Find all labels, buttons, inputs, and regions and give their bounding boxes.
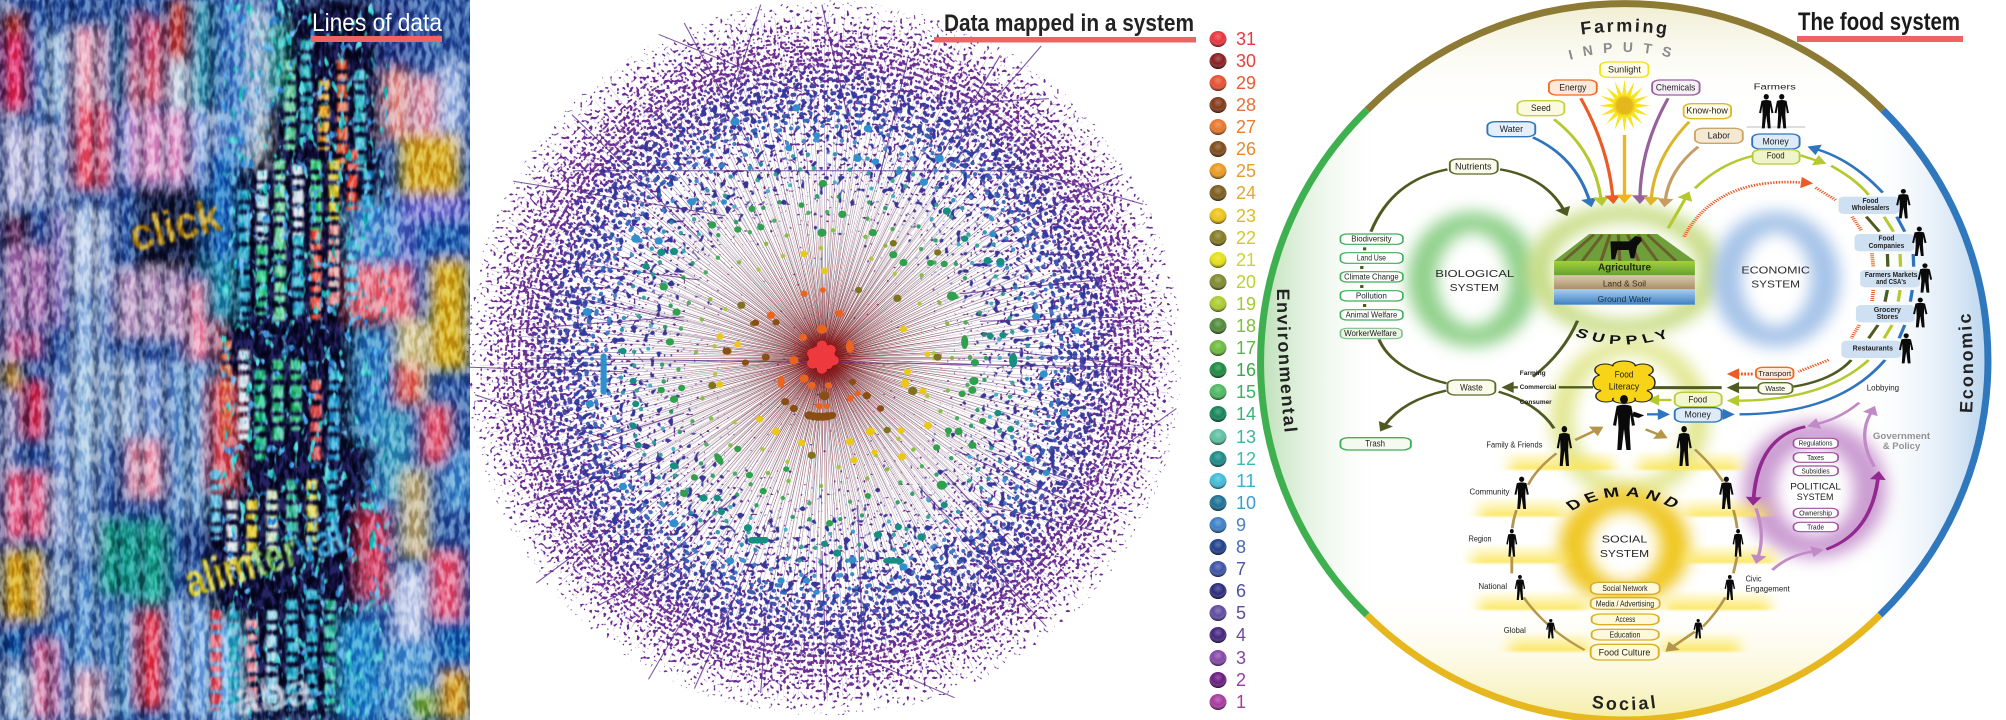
pill: climate change: Climate Change <box>1344 273 1399 282</box>
social scale labels <box>1469 384 1899 635</box>
pill: education: Education <box>1609 631 1640 640</box>
dark column gaps <box>0 0 225 720</box>
legend item 7: 7 <box>1236 559 1246 579</box>
arrow: money to farmers <box>1817 149 1883 193</box>
legend item 15 <box>1210 382 1256 402</box>
farmers group <box>1747 82 1805 128</box>
store: farmers markets <box>1860 263 1932 293</box>
pill: energy: Energy <box>1559 83 1587 93</box>
orange nodes <box>767 287 861 409</box>
pill: land use: Land Use <box>1357 254 1386 263</box>
legend item 11: 11 <box>1236 471 1256 491</box>
agriculture block: Agriculture <box>1598 262 1651 273</box>
legend item 27 <box>1210 117 1256 137</box>
legend item 4: 4 <box>1236 625 1246 645</box>
arrow: transport dotted <box>1684 182 1836 237</box>
label: social: Social <box>1592 695 1655 710</box>
legend item 1: 1 <box>1236 692 1246 712</box>
pill: regulations: Regulations <box>1799 439 1833 447</box>
arrow: nutrients cycle <box>1371 169 1578 383</box>
input pills <box>1450 62 1800 174</box>
legend item 16 <box>1210 360 1256 380</box>
sun icon <box>1599 80 1650 132</box>
legend item 21 <box>1210 250 1256 270</box>
legend item 8 <box>1210 537 1246 557</box>
arrow: money onward <box>1723 411 1724 418</box>
food culture stack <box>1591 582 1660 660</box>
photo grain overlay <box>0 0 470 720</box>
label: political system <box>1790 482 1841 502</box>
arrow: waste return head <box>1737 384 1757 391</box>
arrow: consumer waste <box>1499 392 1554 428</box>
long chord links <box>470 5 1176 698</box>
legend item 23: 23 <box>1236 206 1256 226</box>
legend item 26: 26 <box>1236 139 1256 159</box>
arrow: transport return <box>1737 369 1753 378</box>
ring: agriculture <box>1539 213 1710 328</box>
legend item 28 <box>1210 95 1256 115</box>
outer ring: economic segment <box>1880 110 1988 615</box>
arrow: consumer to society <box>1575 431 1595 440</box>
outer disc with tinted edges <box>1255 0 1995 720</box>
pill: know-how: Know-how <box>1686 106 1728 116</box>
outer ring: farming segment <box>1367 4 1883 110</box>
social scale labels: National <box>1478 582 1507 591</box>
legend item 9: 9 <box>1236 515 1246 535</box>
agriculture block: Ground Water <box>1597 295 1652 304</box>
photo text letters: click <box>124 189 226 262</box>
store: farmers markets: Farmers Markets <box>1865 270 1917 279</box>
agriculture block <box>1554 234 1695 305</box>
arrow: bottom return flows <box>1737 360 1885 414</box>
blurred code screen photograph <box>0 0 470 720</box>
lower diagram <box>1340 361 1930 660</box>
legend: node levels 31 to 1 <box>1210 29 1256 712</box>
legend item 21: 21 <box>1236 250 1256 270</box>
label: environmental: Environmental <box>1277 290 1298 432</box>
pill: food from farmers <box>1753 150 1800 164</box>
legend item 5 <box>1210 603 1246 623</box>
legend item 3 <box>1210 648 1246 668</box>
pill: money from consumer <box>1675 408 1722 422</box>
arrow: commercial waste <box>1512 384 1593 391</box>
legend item 5: 5 <box>1236 603 1246 623</box>
legend item 16: 16 <box>1236 360 1256 380</box>
store: restaurants: Restaurants <box>1853 344 1893 352</box>
label: political system: POLITICAL <box>1790 482 1841 492</box>
pill: seed <box>1517 101 1564 116</box>
demand circle left <box>1512 453 1585 650</box>
label: social system <box>1600 534 1649 559</box>
arrow: chemicals input <box>1640 98 1668 197</box>
legend item 12: 12 <box>1236 449 1256 469</box>
legend item 2 <box>1210 670 1246 690</box>
node rings <box>498 32 1150 684</box>
pill: taxes: Taxes <box>1807 453 1824 462</box>
soft system rings <box>1422 213 1870 593</box>
list connector dots <box>1360 247 1366 307</box>
store: grocery stores <box>1856 298 1927 327</box>
diagram body in zoom coordinates <box>1340 61 1932 661</box>
store: grocery stores: Stores <box>1877 312 1898 321</box>
legend item 10: 10 <box>1236 493 1256 513</box>
farmers group: Farmers <box>1754 82 1796 92</box>
pill: subsidies: Subsidies <box>1801 467 1830 475</box>
legend item 23 <box>1210 206 1256 226</box>
agriculture block: Land & Soil <box>1603 280 1646 289</box>
social scale labels: Civic <box>1746 575 1762 584</box>
legend item 14 <box>1210 404 1256 424</box>
label: government and policy <box>1873 432 1930 451</box>
arrow: water input <box>1533 137 1589 200</box>
legend item 14: 14 <box>1236 404 1256 424</box>
pill: know-how <box>1684 104 1731 119</box>
legend item 18 <box>1210 316 1256 336</box>
label: economic system: ECONOMIC <box>1741 265 1810 276</box>
legend item 2: 2 <box>1236 670 1246 690</box>
legend item 24 <box>1210 183 1256 203</box>
pill: nutrients: Nutrients <box>1455 162 1492 172</box>
pill: food from farmers: Food <box>1767 151 1785 161</box>
label: supply: SUPPLY <box>1576 329 1665 344</box>
pill: water: Water <box>1500 125 1523 134</box>
legend item 6: 6 <box>1236 581 1246 601</box>
pill: animal welfare: Animal Welfare <box>1346 311 1397 320</box>
pill: biodiversity: Biodiversity <box>1351 235 1392 244</box>
arrow: into food culture <box>1673 632 1695 647</box>
title: lines of data: Lines of data <box>312 9 442 37</box>
waste source labels: Farming <box>1520 369 1546 377</box>
pill: return waste: Waste <box>1765 384 1785 393</box>
title: the food system: The food system <box>1798 8 1960 36</box>
pill: transport: Transport <box>1758 369 1791 378</box>
political system pills <box>1793 438 1838 532</box>
store: farmers markets: and CSA's <box>1876 277 1906 286</box>
pill: media advertising: Media / Advertising <box>1596 600 1654 609</box>
ring: political system <box>1759 433 1870 547</box>
olive nodes <box>708 240 942 459</box>
arrow: waste to trash <box>1385 391 1446 425</box>
arrow: literacy to waste <box>1653 383 1722 392</box>
legend item 24: 24 <box>1236 183 1256 203</box>
pill: waste: Waste <box>1460 383 1483 393</box>
pill: ownership: Ownership <box>1799 509 1832 517</box>
pill: trash: Trash <box>1365 439 1385 449</box>
cow icon <box>1610 236 1642 259</box>
arrow: sunlight input <box>1621 135 1628 196</box>
label: economic system <box>1741 265 1810 290</box>
label: government and policy: Government <box>1873 432 1930 441</box>
label: biological system <box>1435 268 1514 293</box>
pill: food to consumer <box>1675 392 1722 407</box>
legend item 29 <box>1210 73 1256 93</box>
pill: food culture: Food Culture <box>1599 648 1650 658</box>
input arrows <box>1371 98 1914 414</box>
hand placed coloured nodes <box>583 104 1080 595</box>
label: inputs: INPUTS <box>1568 42 1672 60</box>
ring: social system <box>1574 500 1675 593</box>
store: restaurants <box>1841 333 1913 363</box>
pills: waste and trash <box>1340 367 1793 450</box>
store: food wholesalers <box>1839 189 1911 218</box>
food literacy cloud <box>1593 361 1655 403</box>
pill: trade: Trade <box>1807 523 1824 531</box>
pill: money to farmers <box>1752 134 1800 149</box>
legend item 31 <box>1210 29 1256 49</box>
outer ring: environmental segment <box>1261 110 1367 615</box>
legend item 3: 3 <box>1236 648 1246 668</box>
arrow: food to market <box>1668 155 1869 228</box>
brown nodes <box>722 319 884 421</box>
pill: money from consumer: Money <box>1685 410 1711 420</box>
store: food companies: Food <box>1878 234 1894 242</box>
yellow nodes <box>716 251 932 463</box>
pill: water <box>1487 122 1535 137</box>
label: biological system: BIOLOGICAL <box>1435 268 1514 279</box>
legend item 29: 29 <box>1236 73 1256 93</box>
pill: pollution: Pollution <box>1356 292 1387 301</box>
pill: labor: Labor <box>1708 131 1730 141</box>
pill: return waste <box>1758 383 1793 394</box>
legend item 11 <box>1210 471 1256 491</box>
legend item 7 <box>1210 559 1246 579</box>
label: economic system: SYSTEM <box>1751 279 1800 290</box>
arrow: money from consumer <box>1647 411 1660 418</box>
legend item 19 <box>1210 294 1256 314</box>
legend item 13 <box>1210 427 1256 447</box>
label: biological system: SYSTEM <box>1450 282 1499 293</box>
legend item 13: 13 <box>1236 427 1256 447</box>
legend item 22: 22 <box>1236 228 1256 248</box>
purple outer node speckle <box>466 0 1182 716</box>
panel: the food system diagram <box>1257 0 1992 720</box>
legend item 30: 30 <box>1236 51 1256 71</box>
glyph columns <box>216 40 368 710</box>
teal nodes <box>619 207 1017 564</box>
pill: chemicals <box>1652 80 1700 95</box>
legend item 12 <box>1210 449 1256 469</box>
ring: biological system <box>1422 222 1524 337</box>
arrow: know-how input <box>1651 122 1689 198</box>
label: demand: DEMAND <box>1566 487 1678 510</box>
legend item 25: 25 <box>1236 161 1256 181</box>
pill: sunlight <box>1600 62 1648 77</box>
legend item 25 <box>1210 161 1256 181</box>
ring: economic system <box>1727 222 1825 337</box>
photo text letters <box>124 189 351 720</box>
store: food wholesalers: Wholesalers <box>1852 203 1889 212</box>
store: food companies: Companies <box>1869 241 1904 250</box>
pill: access: Access <box>1616 615 1635 624</box>
social scale figures <box>1506 426 1744 638</box>
social scale labels: Community <box>1470 488 1510 497</box>
pill: waste <box>1447 380 1495 395</box>
social scale labels: Family & Friends <box>1486 441 1542 450</box>
legend item 1 <box>1210 692 1246 712</box>
waste source labels <box>1520 369 1556 406</box>
label: government and policy: & Policy <box>1883 442 1921 451</box>
arrow: society from consumer <box>1646 429 1659 435</box>
radial links <box>652 186 996 530</box>
legend item 26 <box>1210 139 1256 159</box>
store: grocery stores: Grocery <box>1874 305 1901 314</box>
pill: labor <box>1695 128 1743 143</box>
demand bands <box>1472 450 1775 652</box>
legend item 17: 17 <box>1236 338 1256 358</box>
title: data mapped in a system: Data mapped in a system <box>944 10 1194 37</box>
outer ring: social segment <box>1367 615 1880 720</box>
pill: transport <box>1756 367 1793 379</box>
arrow: food to consumer <box>1657 396 1671 403</box>
demand circle right <box>1695 449 1737 627</box>
legend item 31: 31 <box>1236 29 1256 49</box>
ring: supply <box>1562 347 1698 490</box>
pill: seed: Seed <box>1531 104 1551 113</box>
biological issue list <box>1340 234 1403 339</box>
arrow: labor input <box>1665 147 1698 200</box>
arrow: energy input <box>1581 98 1613 197</box>
green nodes <box>658 180 986 526</box>
social scale labels: Global <box>1504 626 1526 635</box>
social scale labels: Region <box>1469 535 1492 544</box>
legend item 18: 18 <box>1236 316 1256 336</box>
pill: energy <box>1549 80 1597 95</box>
legend item 22 <box>1210 228 1256 248</box>
waste source labels: Consumer <box>1520 398 1552 406</box>
label: political system: SYSTEM <box>1797 493 1833 502</box>
label: social system: SYSTEM <box>1600 548 1649 559</box>
pill: nutrients <box>1450 159 1498 174</box>
pill: worker welfare: WorkerWelfare <box>1344 329 1397 338</box>
pill: food to consumer: Food <box>1688 395 1707 405</box>
legend item 19: 19 <box>1236 294 1256 314</box>
legend item 20: 20 <box>1236 272 1256 292</box>
glyph strokes <box>222 0 387 720</box>
pill: trash <box>1340 438 1411 450</box>
label: social system: SOCIAL <box>1602 534 1647 545</box>
arrow: seed input <box>1554 119 1601 199</box>
field furrows <box>1563 235 1676 261</box>
legend item 15: 15 <box>1236 382 1256 402</box>
legend item 9 <box>1210 515 1246 535</box>
label: economic: Economic <box>1958 314 1974 412</box>
social scale labels: Lobbying <box>1867 384 1899 393</box>
legend item 6 <box>1210 581 1246 601</box>
arrows around waste <box>1385 374 1878 650</box>
cyan and blue nodes <box>583 104 1080 595</box>
legend item 20 <box>1210 272 1256 292</box>
icon: consumer figure <box>1613 395 1644 450</box>
supply chain stores <box>1839 189 1932 363</box>
pill: money to farmers: Money <box>1763 137 1789 147</box>
legend item 17 <box>1210 338 1256 358</box>
panel: lines of data photo <box>0 0 470 720</box>
food literacy cloud: Literacy <box>1609 382 1640 392</box>
legend item 8: 8 <box>1236 537 1246 557</box>
red central cluster <box>807 341 839 374</box>
blue mid node speckle <box>514 48 1134 668</box>
legend item 28: 28 <box>1236 95 1256 115</box>
pill: chemicals: Chemicals <box>1656 83 1696 93</box>
photo text letters: alimterval <box>178 510 351 608</box>
links between stores <box>1851 217 1914 338</box>
political cycle <box>1754 403 1878 570</box>
social scale labels: Engagement <box>1746 585 1790 594</box>
title: lines of data <box>311 13 442 42</box>
legend item 10 <box>1210 493 1256 513</box>
waste source labels: Commercial <box>1520 383 1556 391</box>
pill: sunlight: Sunlight <box>1608 65 1641 75</box>
pill: social network: Social Network <box>1602 584 1648 593</box>
store: food wholesalers: Food <box>1863 196 1878 205</box>
panel: data mapped in a system network <box>466 0 1182 716</box>
label: farming: Farming <box>1580 18 1666 38</box>
legend item 30 <box>1210 51 1256 71</box>
legend item 27: 27 <box>1236 117 1256 137</box>
legend item 4 <box>1210 625 1246 645</box>
store: food companies <box>1855 227 1927 256</box>
food literacy cloud: Food <box>1615 370 1633 380</box>
